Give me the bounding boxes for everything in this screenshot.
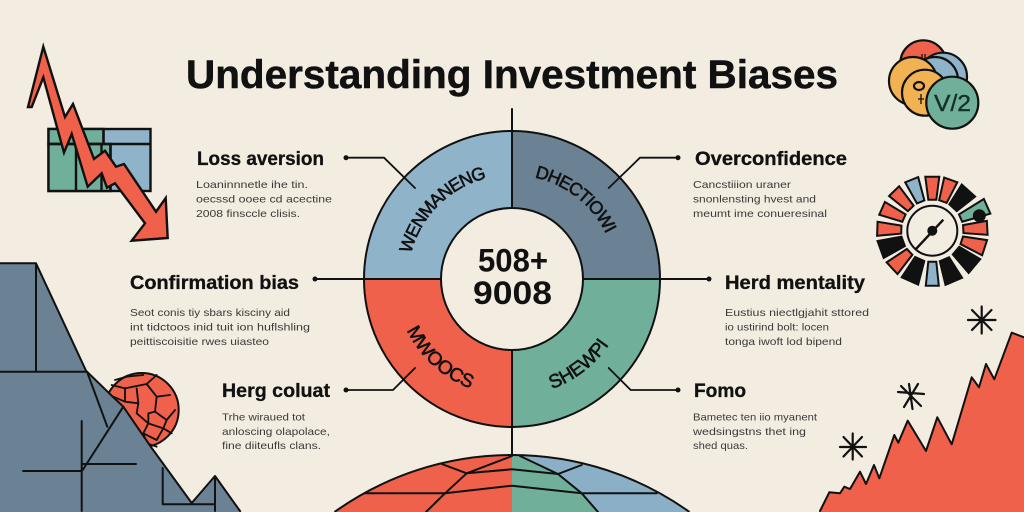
text block: loss aversion [196,149,332,220]
coin label: V/2 [934,90,971,116]
body: Seot conis tiy sbars kisciny aid [130,307,290,319]
icon: cracked red sphere [105,373,179,447]
connector: overconfidence [609,155,680,188]
table chart [48,129,150,191]
ring label: red: MWOOCS [406,324,474,388]
icon: slate mountains [0,263,242,512]
segment: slate [512,131,660,279]
segment: red [364,279,512,427]
body: peittiscoisitie rwes uiasteo [130,336,269,348]
body: Loaninnnetle ihe tin. [196,179,308,191]
body: 2008 ﬁnsccle clisis. [196,208,300,220]
body: Bametec ten iio myanent [693,412,817,424]
ring outline [364,131,660,427]
connector: herd mentality dot [706,276,712,282]
donut chart [363,130,661,428]
body: fine diiteufls clans. [222,440,321,452]
icon: sparkle bottom [840,434,866,460]
icon: sparkle top [968,306,996,334]
text block: herg coluat [222,381,331,452]
heading: Confirmation bias [130,273,299,294]
heading: Loss aversion [197,149,324,170]
body [196,179,332,220]
text block: confirmation bias [130,273,310,348]
icon: overlapping coins [889,40,978,129]
center disc [441,208,583,350]
red falling arrow [28,47,168,241]
body [222,412,330,452]
body: oecssd ooee cd acectine [196,194,332,206]
icon: sparkle middle [898,384,924,409]
ring label: green: SHEWPI [549,338,608,388]
body [693,179,827,220]
axis lines [315,109,709,455]
ring label: blue: WENMANENG [398,167,486,250]
heading: Overconfidence [695,149,847,170]
body: tonga iwoft lod bipend [725,336,842,348]
body [725,307,869,348]
title: Understanding Investment Biases [186,53,838,97]
body [130,307,310,348]
segment: blue [364,131,512,279]
center number: 508+ [478,243,548,279]
heading: Fomo [694,381,746,402]
icon: roulette gauge [877,177,990,286]
body: shed quas. [693,440,748,452]
body: meumt ime conueresinal [693,208,827,220]
connector: herg coluat [344,368,415,392]
heading: Herg coluat [222,381,331,402]
connector: confirmation bias dot [312,276,318,282]
connector: loss aversion [344,155,415,188]
body: Eustius niectlgjahit sttored [725,307,869,319]
text block: fomo [692,381,817,452]
text block: overconfidence [693,149,847,220]
segment: green [512,279,660,427]
heading: Herd mentality [725,273,865,294]
body: wedsingstns thet ing [692,426,806,438]
globe [334,455,690,512]
icon: falling arrow over table [28,47,168,241]
ring label: slate: DHECTIOWI [536,166,617,233]
body: io ustirind bolt: locen [725,322,829,334]
icon: red rising chart [819,333,1024,512]
body: snonlensting hvest and [693,194,816,206]
body: int tidctoos inid tuit ion huflshling [130,322,310,334]
body [692,412,817,452]
center number [473,243,552,311]
text block: herd mentality [725,273,869,348]
body: Cancstiiion uraner [693,179,792,191]
body: Trhe wiraued tot [222,412,305,424]
connector: fomo [609,368,680,392]
center number: 9008 [473,275,552,311]
ring dividers [364,131,660,427]
body: anloscing olapolace, [222,426,330,438]
